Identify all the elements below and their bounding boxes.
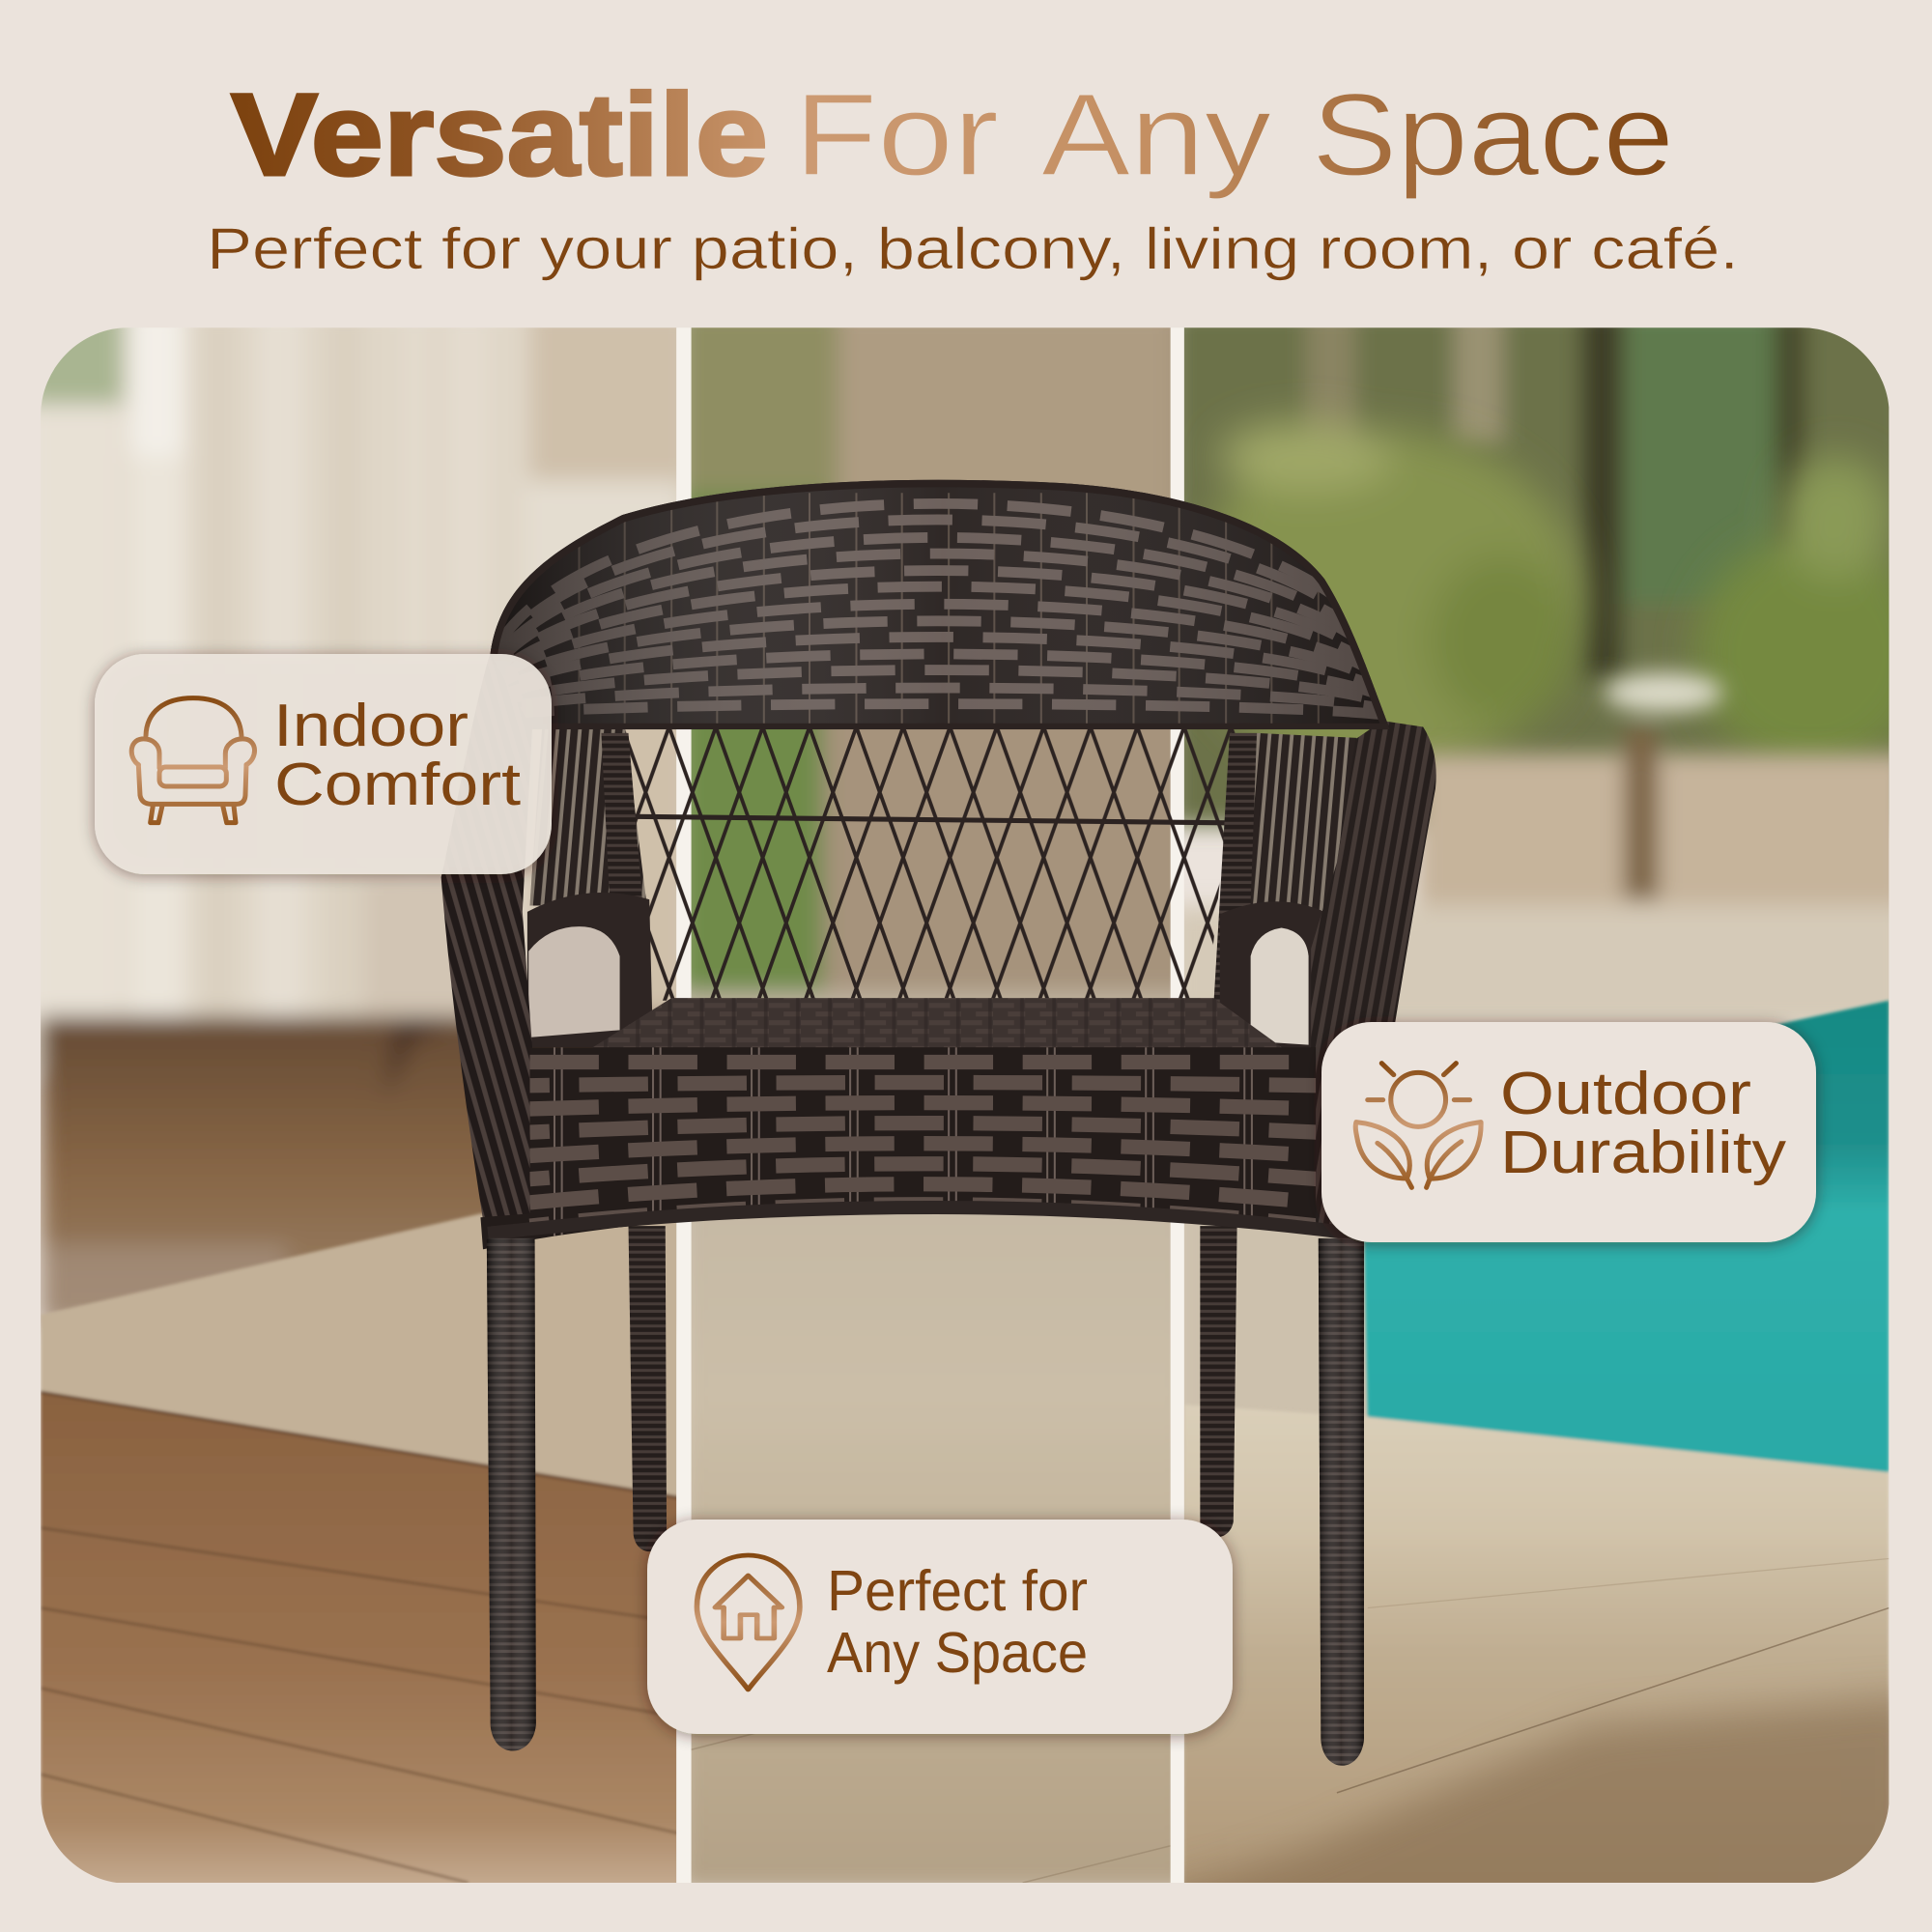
chair [441, 469, 1436, 1766]
upper back weave [480, 469, 1405, 733]
inner side strands [529, 727, 1386, 912]
label: perfect for any space: Perfect for [827, 1559, 1088, 1623]
title: Any [1041, 69, 1272, 200]
callout: outdoor durability [1321, 1022, 1816, 1242]
divider strips [676, 327, 1184, 1883]
icon: house location pin [696, 1555, 800, 1690]
label: perfect for any space [827, 1559, 1088, 1685]
back legs [629, 1226, 1237, 1551]
callout: indoor comfort [95, 654, 552, 874]
label: indoor comfort: Comfort [274, 752, 521, 818]
title: For [794, 69, 999, 200]
label: outdoor durability [1500, 1061, 1786, 1186]
scene: indoor room [25, 308, 715, 1897]
side wings [441, 653, 532, 1220]
subtitle: Perfect for your patio, balcony, living room, or café. [207, 216, 1739, 281]
label: outdoor durability: Outdoor [1500, 1061, 1751, 1127]
icon: sun and leaves [1355, 1064, 1481, 1187]
front legs [487, 1238, 1364, 1766]
label: indoor comfort [273, 693, 521, 818]
title [231, 69, 1674, 200]
label: indoor comfort: Indoor [273, 693, 469, 759]
posts [601, 733, 1257, 1029]
callout: perfect for any space [647, 1520, 1233, 1734]
seat [593, 998, 1281, 1047]
scene: poolside [1184, 327, 1889, 1883]
icon: armchair [131, 698, 255, 823]
title: Space [1312, 69, 1674, 200]
armrests [527, 893, 1337, 1054]
front apron weave [474, 1041, 1324, 1257]
lattice backrest [622, 727, 1236, 1001]
scene: patio wall [678, 308, 1195, 1891]
title: Versatile [231, 69, 768, 200]
label: outdoor durability: Durability [1500, 1120, 1786, 1186]
label: perfect for any space: Any Space [827, 1621, 1088, 1685]
bottom band [488, 1208, 1361, 1235]
